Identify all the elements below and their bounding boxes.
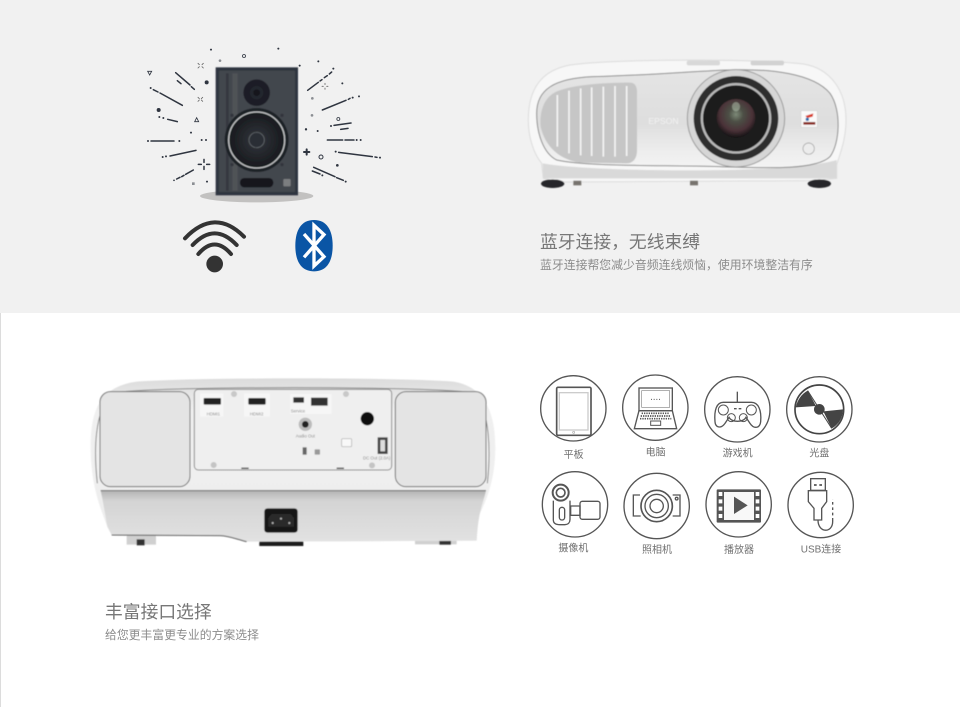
heading: interfaces: 丰富接口选择 [105,602,212,622]
speaker shadow [200,190,313,202]
text: interfaces description: 给您更丰富更专业的方案选择 [105,628,259,642]
label badge [801,111,817,127]
icon: tablet [541,376,606,441]
icon: wifi [185,222,244,272]
right panel [395,392,486,487]
vent [540,83,637,163]
label: camcorder: 摄像机 [558,541,588,554]
label: camera: 照相机 [642,543,672,556]
connector panel: HDMI2 [250,411,264,416]
projector rear photo [91,378,495,546]
icon: bluetooth [295,220,333,271]
icon: gamepad [705,377,770,442]
heading: bluetooth: 蓝牙连接，无线束缚 [540,232,700,252]
top grey background panel [0,0,960,313]
icon: disc [787,377,852,442]
rear body [91,378,495,542]
connector panel: Service [291,409,306,414]
icon: camcorder [542,472,608,537]
brand mark: EPSON [648,116,679,126]
connector panel: Audio Out [296,433,316,438]
label: laptop: 电脑 [646,446,666,459]
speaker illustration [147,48,381,202]
label: disc: 光盘 [809,447,829,460]
left panel [100,392,190,487]
icon: usb [788,472,853,538]
sound rays [151,63,377,180]
rear feet [127,534,457,546]
device icon grid [541,375,853,556]
label: usb: USB连接 [801,542,841,555]
connector panel: DC Out (2.0A) [363,455,391,460]
label: gamepad: 游戏机 [723,447,753,460]
text: bluetooth description: 蓝牙连接帮您减少音频连线烦恼，使用环境整洁有序 [540,258,813,272]
projector face [537,70,838,168]
icon: laptop [623,375,688,440]
lens [687,70,785,167]
icon: camera [624,473,689,539]
round button [803,143,814,154]
power socket [264,508,298,533]
projector front photo [528,60,846,188]
label: tablet: 平板 [564,448,584,461]
sound particles [147,48,381,185]
icon: video player [706,472,771,537]
speaker cabinet [216,67,298,195]
label: video player: 播放器 [724,543,754,556]
projector body [528,60,846,182]
connector panel [194,389,392,470]
connector panel: HDMI1 [207,411,221,416]
projector feet [541,179,831,188]
